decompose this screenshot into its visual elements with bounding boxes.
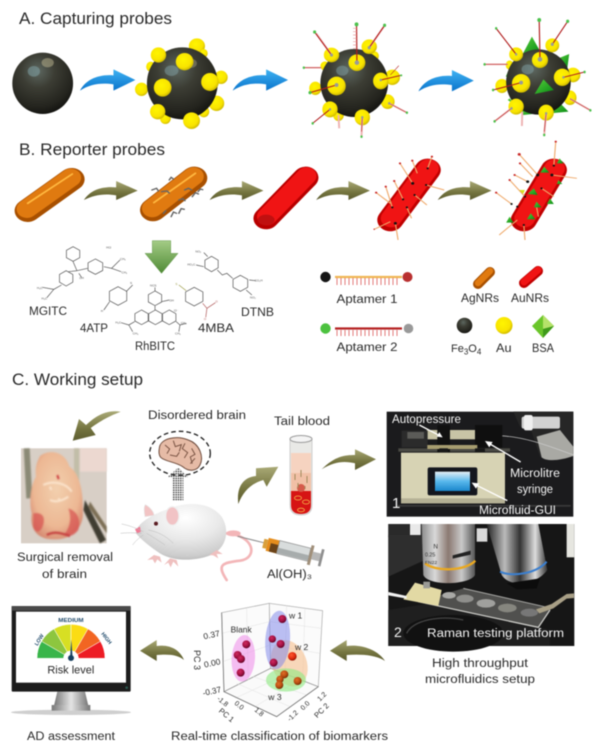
icon: blood tube <box>290 436 312 515</box>
GUI screen <box>428 467 477 495</box>
white pointer arrows <box>419 425 439 435</box>
molecule: DTNB: CO₂H <box>255 279 263 283</box>
legend: BSA <box>532 315 554 355</box>
plot labels: PC 3 <box>192 650 202 670</box>
molecule: RhBITC <box>115 284 187 336</box>
label: High throughput microfluidics setup: High throughput <box>432 658 529 670</box>
legend: Fe3O4: 4 <box>477 348 482 356</box>
data points <box>234 615 302 689</box>
icon: sphere with aptamer 2 strands <box>303 22 408 138</box>
arrow: olive step 1 <box>84 181 138 200</box>
arrow: blue step 1 <box>80 69 135 91</box>
photo: surgically removed brain <box>21 448 107 543</box>
label: number 2: 2 <box>394 624 402 640</box>
label: 4ATP: 4ATP <box>80 323 108 335</box>
molecule: RhBITC: CH₃ <box>133 332 138 336</box>
plot labels: 0.37 <box>202 628 221 641</box>
label: Surgical removal of brain: Surgical removal <box>17 552 113 564</box>
plot labels <box>192 611 331 724</box>
icon: disordered brain in dashed ring <box>150 431 210 475</box>
label: MGITC: MGITC <box>29 306 67 318</box>
arrow: mouse to surgical removal <box>73 411 121 441</box>
arrow: olive step 3 <box>316 181 370 200</box>
tape and clip <box>403 583 442 606</box>
molecule: MGITC <box>37 246 127 301</box>
molecule: MGITC: HCl <box>106 246 112 249</box>
molecule: DTNB <box>187 250 263 299</box>
cluster: w 3 <box>266 668 306 692</box>
photo 2: Raman testing platform: 0.25 <box>425 553 435 559</box>
molecule: MGITC: H₃C <box>42 297 47 301</box>
pump body <box>401 453 505 503</box>
plot labels: -1.2 <box>286 710 300 723</box>
photo 2: Raman testing platform: FN22 <box>425 560 437 566</box>
molecule: RhBITC: CH₃ <box>175 332 181 336</box>
icon: AgNR rod with Raman reporters <box>152 173 203 217</box>
label: Al(OH)3: Al(OH)₃ <box>267 569 312 581</box>
heading: A. Capturing probes: A. Capturing probes <box>19 9 172 28</box>
label: High throughput microfluidics setup <box>425 658 535 686</box>
gauge labels <box>34 618 112 647</box>
plot labels: -0.37 <box>202 684 222 698</box>
plot labels: PC 1 <box>217 706 236 724</box>
label: AD assessment: AD assessment <box>27 731 116 743</box>
legend: Aptamer 1: Aptamer 1 <box>336 294 398 306</box>
legend: AuNRs: AuNRs <box>511 293 549 305</box>
label: RhBITC: RhBITC <box>135 341 175 353</box>
icon: Al(OH)3 syringe <box>235 527 325 568</box>
cluster: Blank <box>230 634 257 682</box>
molecule: RhBITC: NCS <box>150 284 157 288</box>
legend: Fe3O4: O <box>468 343 477 355</box>
plot labels: Blank <box>231 624 252 634</box>
label: Microfluid-GUI: Microfluid-GUI <box>479 505 556 517</box>
plot labels: 1.2 <box>316 691 328 703</box>
arrow: blue step 3 <box>418 70 474 91</box>
molecule: 4MBA: S <box>175 282 178 286</box>
plot labels: w 3 <box>267 692 282 702</box>
label: number 1: 1 <box>392 495 400 512</box>
molecule: 4MBA: O <box>204 317 207 321</box>
molecule: 4ATP <box>101 281 133 313</box>
molecule: DTNB: HO₂C <box>187 263 195 266</box>
cluster: w 2 <box>264 635 314 692</box>
molecule: 4ATP: H <box>101 309 103 313</box>
icon: AgNR rod <box>27 174 72 211</box>
molecule: MGITC: H₃C <box>37 286 43 290</box>
photo 2: Raman testing platform <box>388 524 574 652</box>
legend: AgNRs: AgNRs <box>461 293 499 305</box>
plot labels: 1.8 <box>253 707 265 719</box>
tail <box>222 533 251 580</box>
icon: AuNR rod <box>258 176 307 225</box>
glass slide <box>418 588 552 627</box>
arrow: olive step 2 <box>210 181 263 200</box>
label: Microlitre syringe: Microlitre <box>510 468 560 480</box>
plot walls <box>222 603 323 717</box>
microscope arm <box>513 412 573 460</box>
icon: AuNR rod with aptamer 1 <box>373 156 444 240</box>
label: Real-time classification of biomarkers: Real-time classification of biomarkers <box>171 731 388 743</box>
molecule: 4MBA: O <box>215 300 219 304</box>
plot labels: -1.8 <box>215 695 229 709</box>
label: Autopressure: Autopressure <box>392 414 461 426</box>
label: Surgical removal of brain <box>17 552 113 581</box>
pump rail and clamps <box>398 448 510 452</box>
label: Raman testing platform: Raman testing platform <box>427 628 564 640</box>
icon: sphere with aptamers and BSA <box>483 18 592 136</box>
legend: Fe3O4: Fe <box>451 343 464 355</box>
molecule: RhBITC: CH₃ <box>181 321 186 325</box>
legend: Aptamer 1 <box>320 272 412 306</box>
molecule: RhBITC: OH <box>169 299 174 302</box>
arrow: mouse to tail blood <box>238 467 278 504</box>
label: Disordered brain: Disordered brain <box>148 410 246 422</box>
label: High throughput microfluidics setup: microfluidics setup <box>425 674 535 686</box>
plot labels: PC 2 <box>312 701 331 720</box>
gauge labels: MEDIUM <box>58 618 84 624</box>
body <box>136 504 226 560</box>
legend: Fe3O4: 3 <box>464 348 469 356</box>
arrow: tail blood to syringe pump <box>322 449 376 470</box>
chart: 3D PCA classification <box>192 603 331 724</box>
heading: C. Working setup: C. Working setup <box>12 370 143 389</box>
label: 4MBA: 4MBA <box>198 323 234 335</box>
risk gauge <box>37 624 105 661</box>
molecule: MGITC: OH <box>79 276 84 280</box>
legend: Au <box>496 317 512 355</box>
cluster: w 1 <box>263 610 292 670</box>
icon: dotted up arrow <box>167 467 188 501</box>
panel: Raman reporter molecules <box>37 241 263 336</box>
icon: white mouse <box>121 504 251 580</box>
molecule: 4MBA <box>175 282 219 321</box>
molecule: MGITC: CH₃ <box>122 271 127 274</box>
heading: B. Reporter probes: B. Reporter probes <box>19 140 165 159</box>
plot labels: 0.0 <box>300 700 312 712</box>
molecule: DTNB: NO₂ <box>195 250 201 254</box>
arrow: blue step 2 <box>233 69 288 91</box>
gauge labels: LOW <box>34 633 46 647</box>
legend: Aptamer 2 <box>320 323 413 354</box>
molecule: RhBITC: Cl⁻ <box>174 309 179 313</box>
panel: capturing probes sequence <box>12 18 592 138</box>
photo 2: Raman testing platform: N <box>433 543 438 550</box>
icon: monitor with risk gauge <box>11 606 131 715</box>
plot labels: w 1 <box>288 611 303 621</box>
label: Microlitre syringe: syringe <box>517 484 553 496</box>
molecule: RhBITC: H₃C <box>115 321 121 324</box>
icon: bare Fe3O4 sphere <box>12 53 73 114</box>
molecule: DTNB: NO₂ <box>250 296 256 299</box>
plot labels: w 2 <box>294 642 309 652</box>
gauge labels: HIGH <box>99 632 112 646</box>
legend: AgNRs <box>461 271 499 305</box>
right objective <box>487 524 547 583</box>
label: Microlitre syringe <box>510 468 560 496</box>
panel: reporter probes sequence <box>27 141 577 240</box>
icon: green down arrow <box>145 241 178 273</box>
arrow: setup to classification <box>330 640 385 661</box>
molecule: MGITC: CH₃ <box>120 257 126 261</box>
legend: Au: Au <box>496 343 512 355</box>
photo 1: syringe pump <box>387 412 573 517</box>
left objective <box>422 524 475 583</box>
legend: AuNRs <box>511 270 549 305</box>
legend: Aptamer 2: Aptamer 2 <box>336 342 398 354</box>
stage <box>388 603 550 646</box>
legend: Fe3O4 <box>451 318 482 356</box>
icon: AuNR rod with aptamer 1 and BSA <box>495 141 577 240</box>
plot labels: 0.0 <box>233 700 245 712</box>
label: Risk level: Risk level <box>47 664 94 676</box>
plot labels: 0.00 <box>203 656 222 670</box>
legend: BSA: BSA <box>532 343 554 355</box>
icon: sphere with gold particles <box>135 38 228 129</box>
arrow: olive step 4 <box>438 181 492 200</box>
label: Surgical removal of brain: of brain <box>42 569 87 581</box>
molecule: 4ATP: S <box>130 281 132 285</box>
arrow: classification to assessment <box>140 640 184 661</box>
label: DTNB: DTNB <box>241 307 274 319</box>
label: Tail blood: Tail blood <box>274 416 330 428</box>
